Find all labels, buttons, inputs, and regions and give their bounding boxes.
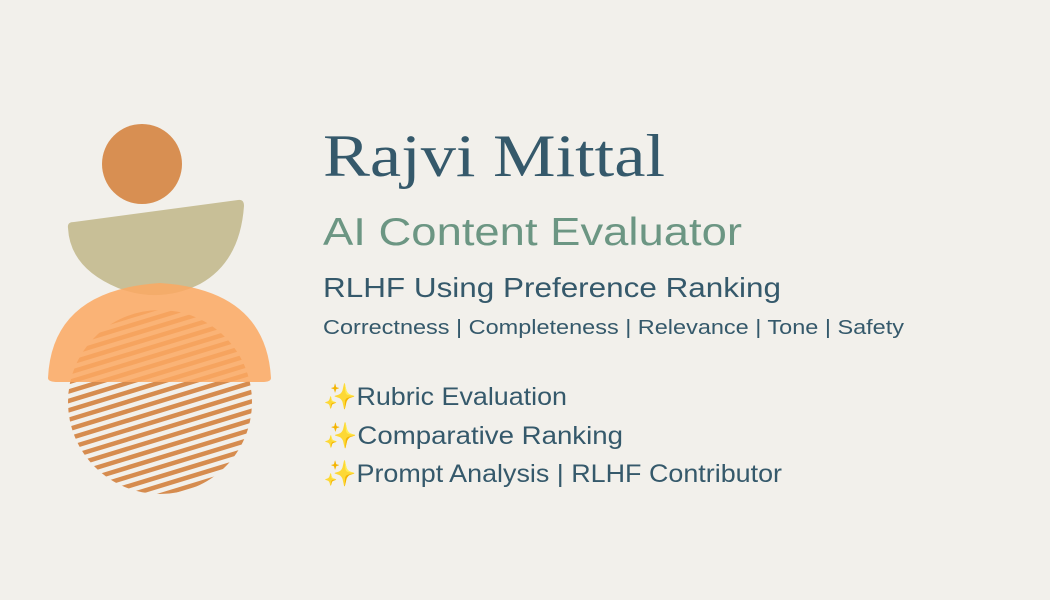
list item 1: ✨Rubric Evaluation xyxy=(323,383,567,411)
shape: bowl xyxy=(68,200,244,295)
illustration: stacked abstract shapes xyxy=(48,124,271,494)
heading: RLHF: RLHF Using Preference Ranking xyxy=(323,272,781,303)
list: skills xyxy=(323,383,782,488)
title: name: Rajvi Mittal xyxy=(323,123,665,189)
shape: orange semicircle xyxy=(48,283,271,382)
shape: hatched circle xyxy=(68,310,252,494)
shape: top circle xyxy=(102,124,182,204)
list item 2: ✨Comparative Ranking xyxy=(323,422,623,450)
text: criteria: Correctness | Completeness | Relevance | Tone | Safety xyxy=(323,317,904,339)
subtitle: role: AI Content Evaluator xyxy=(323,211,742,254)
list item 3: ✨Prompt Analysis | RLHF Contributor xyxy=(323,460,782,488)
